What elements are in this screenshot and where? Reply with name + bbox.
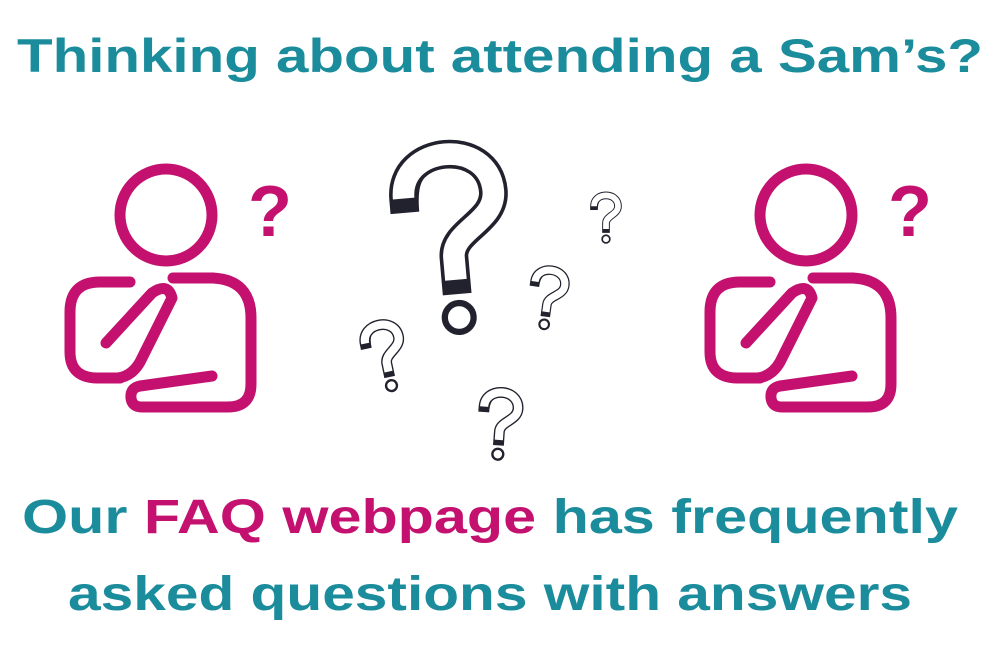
icon: right person with question: ?: [888, 172, 932, 252]
text: bottom message line 2: asked questions with answers: [68, 568, 912, 621]
title: Thinking about attending a Sam’s?: [17, 29, 983, 82]
icon: left person with question: [70, 169, 292, 407]
icon: left person with question: ?: [248, 172, 292, 252]
icon: right person with question: [710, 169, 932, 407]
text: bottom message line 1: Our FAQ webpage has frequently: [22, 491, 958, 544]
icon: cluster of question marks: [362, 150, 618, 461]
